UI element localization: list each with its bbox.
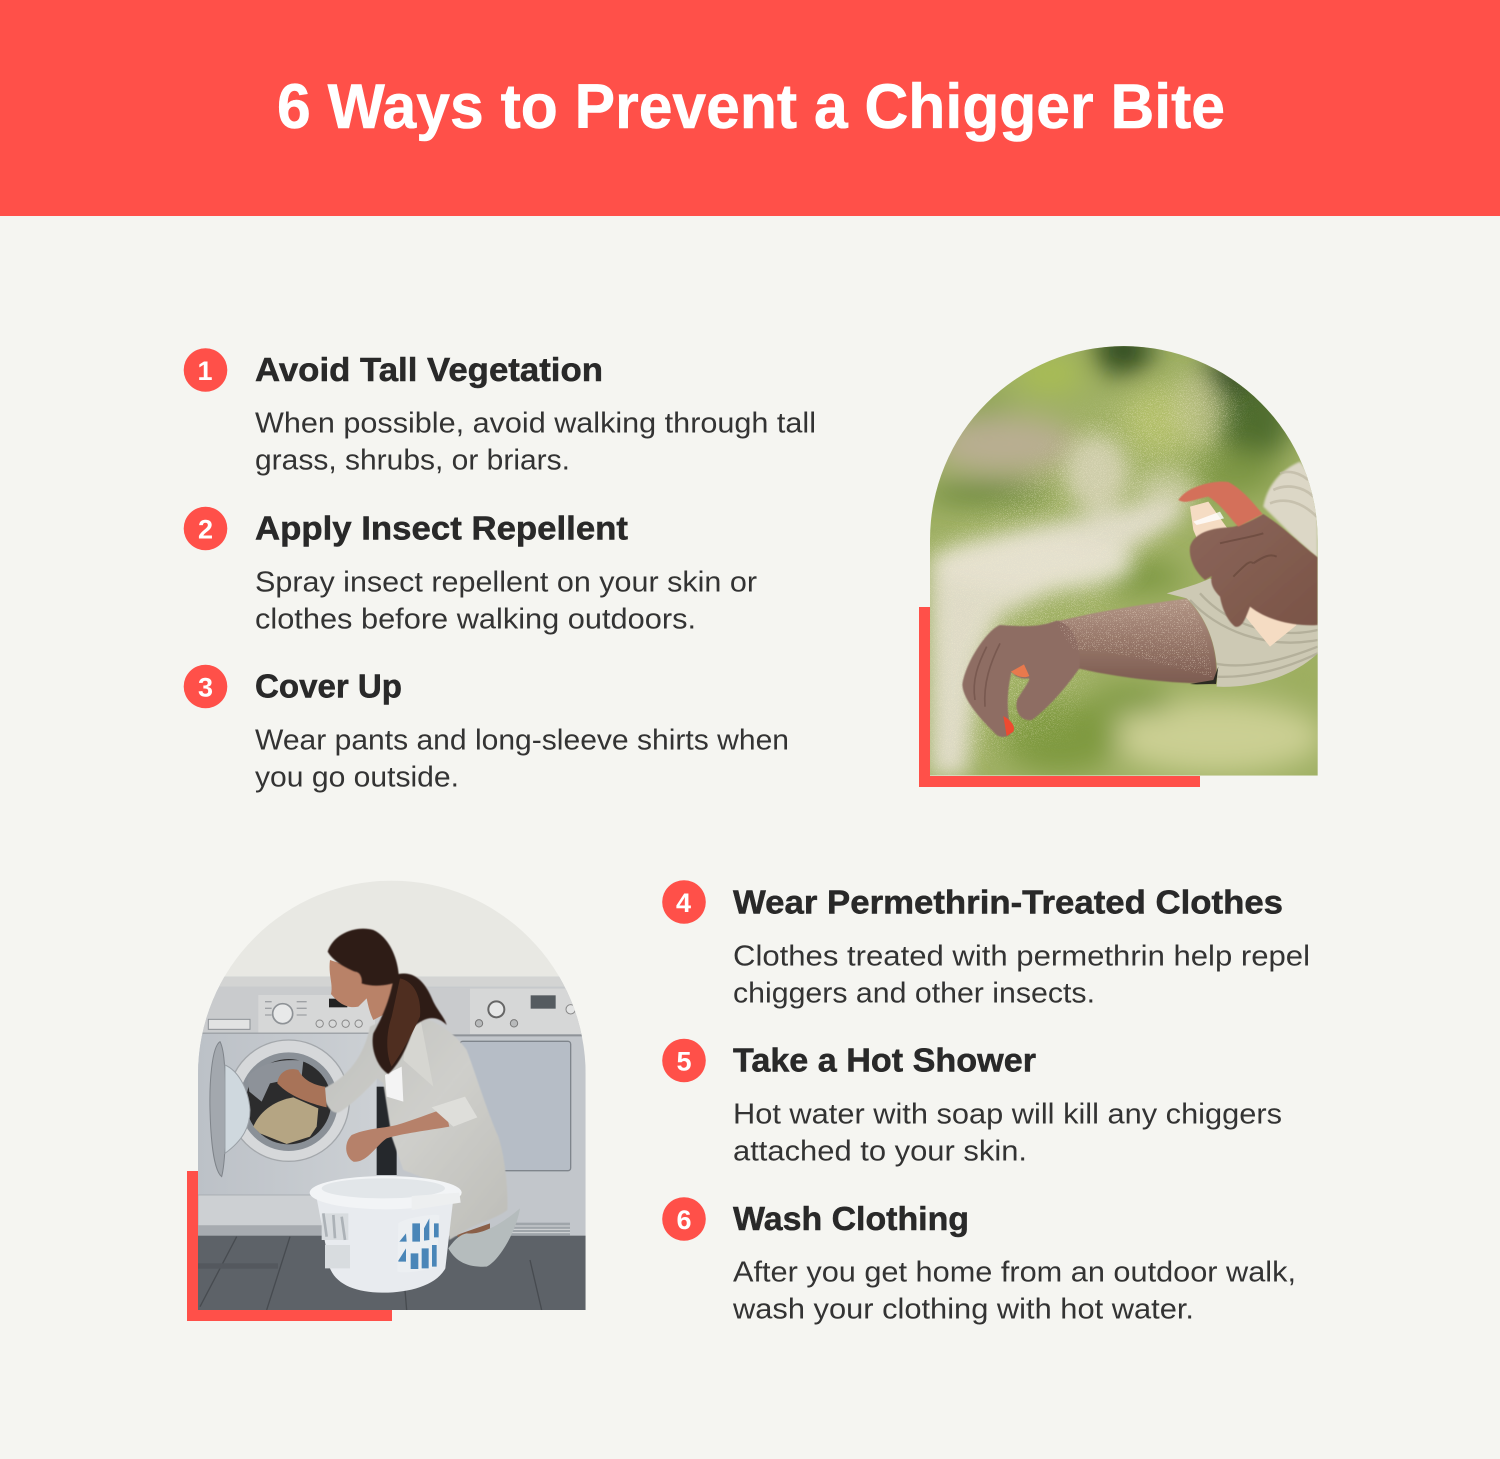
spray droplets [930, 370, 1247, 776]
step 5: take a hot shower: Take a Hot Shower [733, 1042, 1036, 1078]
step 6: wash clothing: After you get home from an outdoor walk, [733, 1256, 1296, 1288]
step 1: avoid tall vegetation: 1 [197, 356, 213, 386]
photo: woman loading washing machine [198, 880, 588, 1312]
title: 6 Ways to Prevent a Chigger Bite [277, 72, 1225, 142]
step 3: cover up: 3 [198, 672, 213, 702]
step 6: wash clothing [662, 1197, 1296, 1326]
upper sleeve [1263, 462, 1318, 558]
step 5: take a hot shower: 5 [676, 1046, 692, 1076]
step 5: take a hot shower: attached to your skin. [733, 1136, 1027, 1168]
red corner accent: spray photo [919, 607, 1200, 787]
step 6: wash clothing: wash your clothing with hot water. [732, 1294, 1194, 1326]
red corner accent: laundry photo [187, 1171, 392, 1321]
step 3: cover up: Wear pants and long-sleeve shirts when [255, 724, 789, 756]
appliance bodies [198, 977, 588, 1237]
woman: lower arm and hand [346, 1108, 449, 1162]
washer door ring and drum [228, 1040, 349, 1161]
step 4: wear permethrin-treated clothes: 4 [676, 888, 691, 918]
step 3: cover up [184, 665, 789, 794]
step 1: avoid tall vegetation: When possible, avoid walking through tall [255, 408, 816, 440]
dryer panel [427, 987, 583, 1035]
woman: shirt [323, 1015, 508, 1240]
step 5: take a hot shower [662, 1039, 1282, 1168]
open washer door [210, 1042, 225, 1177]
step 5: take a hot shower: Hot water with soap will kill any chiggers [733, 1098, 1282, 1130]
step 2: apply insect repellent: 2 [198, 514, 213, 544]
forearm droplets [1057, 599, 1212, 677]
step 4: wear permethrin-treated clothes [662, 880, 1310, 1010]
dryer door [460, 1041, 571, 1171]
gap between machines [377, 1087, 397, 1175]
step 4: wear permethrin-treated clothes: chiggers and other insects. [733, 978, 1095, 1010]
woman: legs and socks [448, 1208, 520, 1267]
washer front [198, 1034, 376, 1178]
left forearm [1050, 598, 1217, 684]
step 2: apply insect repellent: Apply Insect Repellent [255, 510, 628, 546]
floor [198, 1236, 588, 1312]
wall [225, 881, 559, 976]
photo: spraying insect repellent on arm [923, 325, 1323, 777]
step 1: avoid tall vegetation [184, 348, 816, 476]
step 2: apply insect repellent: Spray insect repellent on your skin or [255, 566, 757, 598]
trigger finger [1178, 482, 1263, 527]
step 3: cover up: you go outside. [255, 762, 459, 794]
laundry basket [310, 1176, 462, 1293]
step 6: wash clothing: Wash Clothing [733, 1200, 969, 1237]
step 4: wear permethrin-treated clothes: Wear Permethrin-Treated Clothes [733, 884, 1283, 920]
step 1: avoid tall vegetation: grass, shrubs, or briars. [255, 444, 570, 476]
right sleeve cuff [1167, 578, 1318, 687]
step 3: cover up: Cover Up [255, 668, 402, 704]
woman: neck and face [330, 960, 397, 1020]
left hand [962, 621, 1080, 737]
header banner [0, 0, 1500, 216]
step 1: avoid tall vegetation: Avoid Tall Vegetation [255, 351, 603, 388]
woman: hair [328, 929, 447, 1074]
step 6: wash clothing: 6 [676, 1205, 692, 1235]
spray bottle [1190, 502, 1297, 647]
step 2: apply insect repellent [184, 507, 757, 636]
step 4: wear permethrin-treated clothes: Clothes treated with permethrin help repel [733, 940, 1310, 972]
spraying hand [1190, 514, 1318, 627]
step 2: apply insect repellent: clothes before walking outdoors. [255, 604, 696, 636]
woman: reaching arm [277, 1069, 327, 1107]
